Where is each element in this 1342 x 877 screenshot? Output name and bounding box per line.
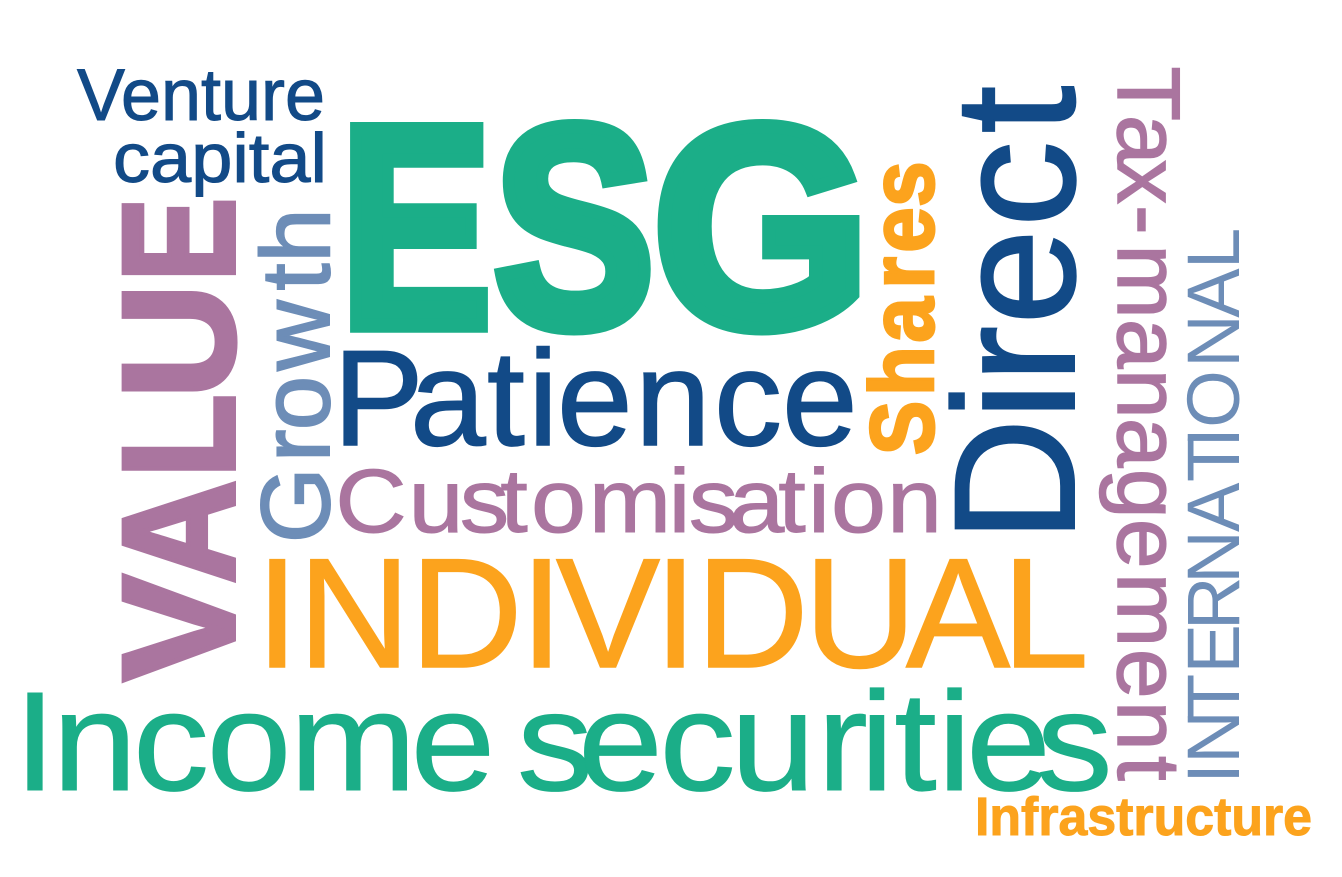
word: INDIVIDUAL: INDIVIDUAL [256, 527, 1089, 701]
word: Growth: Growth [241, 209, 350, 543]
word: VALUE: U [90, 284, 268, 399]
word: Shares: Shares [852, 162, 953, 455]
word: VALUE: L [91, 394, 268, 478]
word: ESG: S [494, 67, 654, 386]
word: ESG: G [653, 66, 870, 386]
word: ESG: E [340, 67, 491, 387]
word: VALUE: E [90, 198, 268, 282]
word: ESG [340, 66, 870, 387]
word: VALUE [90, 198, 268, 681]
word: Customisation: Customisation [335, 451, 942, 552]
word: Infrastructure: Infrastructure [975, 787, 1312, 847]
word: Income securities: Income securities [14, 663, 1113, 821]
word: Patience: Patience [333, 322, 858, 474]
word: Tax-management: Tax-management [1099, 66, 1199, 781]
word: Direct: Direct [919, 86, 1111, 542]
word: VALUE: V [90, 575, 268, 681]
word: capital: capital [113, 119, 327, 197]
word: Venture: Venture [77, 55, 325, 136]
word: VALUE: A [91, 480, 268, 584]
word: INTERNATIONAL: INTERNATIONAL [1172, 228, 1255, 784]
